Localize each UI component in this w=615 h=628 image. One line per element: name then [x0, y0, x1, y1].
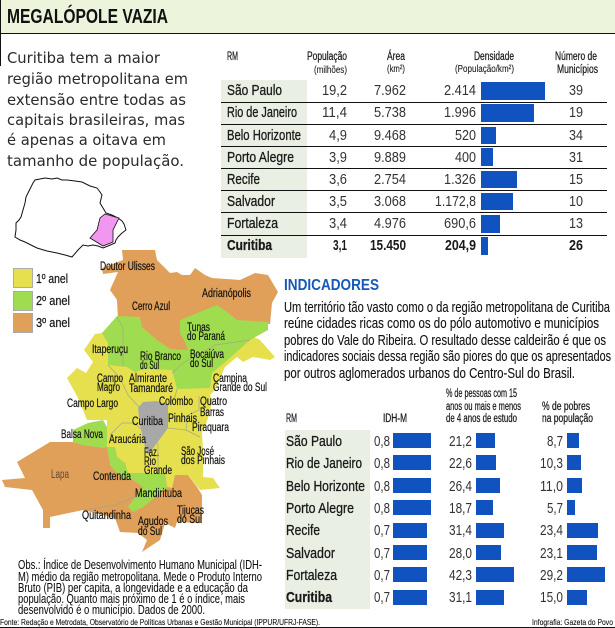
- row: Fortaleza: [286, 567, 605, 584]
- row: Recife: [227, 171, 583, 188]
- municipality labels: Quatro: [200, 396, 227, 408]
- row: Salvador: 0,7: [374, 546, 390, 562]
- row: Salvador: Salvador: [286, 546, 335, 562]
- municipality labels: Campo: [97, 373, 123, 385]
- indicators table: [285, 388, 605, 609]
- municipality labels: Balsa Nova: [61, 429, 103, 441]
- municipality labels: Campo Largo: [67, 398, 118, 410]
- row: São Paulo: [286, 433, 579, 450]
- row: Curitiba: [286, 590, 587, 606]
- legend: [14, 268, 70, 332]
- observation note: [18, 557, 262, 617]
- municipality labels: do Sul: [177, 514, 202, 526]
- municipality labels: Campina: [213, 373, 247, 385]
- observation note: Bruto (PIB) per capita, a longevidade e a educação da: [18, 580, 249, 595]
- table header: Número de: [555, 51, 597, 63]
- row: Recife: Recife: [286, 523, 320, 539]
- observation note: população. Quanto mais próximo de 1 é o índice, mais: [18, 591, 245, 606]
- table header: (km²): [387, 64, 405, 75]
- row: Porto Alegre: 31: [569, 150, 583, 166]
- row: Rio de Janeiro: 11,4: [322, 105, 347, 121]
- municipality labels: do Sul: [190, 358, 213, 370]
- municipality labels: Doutor Ulisses: [100, 261, 155, 273]
- municipality labels: Adrianópolis: [202, 288, 251, 300]
- row label background: [221, 80, 307, 258]
- Curitiba centre: [138, 401, 168, 455]
- row: São Paulo: 21,2: [449, 434, 472, 450]
- table header: Municípios: [557, 64, 598, 76]
- table header: de 4 anos de estudo: [446, 413, 517, 425]
- municipality labels: Bocaiúva: [190, 349, 224, 361]
- municipality labels: Cerro Azul: [132, 301, 170, 313]
- row: São Paulo: 2.414: [444, 83, 476, 99]
- row: Curitiba: 26: [569, 238, 583, 254]
- table header: RM: [286, 413, 297, 425]
- table header: População: [307, 51, 347, 63]
- row: São Paulo: 39: [569, 83, 583, 99]
- highlighted metropolitan region: [90, 214, 119, 246]
- row: Rio de Janeiro: 10,3: [540, 456, 563, 472]
- municipality labels: Magro: [97, 382, 120, 394]
- intro text: capitais brasileiras, mas: [7, 111, 185, 129]
- municipality labels: Tamandaré: [129, 383, 173, 395]
- municipality labels: Agudos: [138, 516, 168, 528]
- table header: Densidade: [474, 51, 514, 63]
- table header: na população: [542, 413, 593, 425]
- row: São Paulo: São Paulo: [286, 434, 342, 450]
- first ring: [67, 333, 275, 490]
- observation note: desenvolvido é o município. Dados de 2000.: [18, 602, 205, 617]
- municipality labels: Quitandinha: [82, 510, 131, 522]
- table header: (milhões): [314, 65, 347, 76]
- row: Curitiba: Curitiba: [286, 590, 333, 606]
- row: Salvador: [286, 545, 597, 562]
- row: Salvador: 1.172,8: [435, 194, 476, 210]
- table header: [286, 388, 593, 425]
- row: Belo Horizonte: [227, 127, 583, 144]
- table header: % de pobres: [542, 401, 590, 413]
- indicators heading: INDICADORES: [284, 277, 379, 294]
- intro text: Curitiba tem a maior: [7, 49, 161, 67]
- row: Curitiba: 3,1: [333, 238, 347, 254]
- second ring Balsa Nova: [73, 420, 107, 448]
- municipality labels: Faz.: [144, 447, 159, 459]
- municipality labels: Mandirituba: [135, 488, 182, 500]
- row: Belo Horizonte: Belo Horizonte: [227, 128, 301, 144]
- municipality labels: Curitiba: [132, 416, 163, 428]
- row: Salvador: 23,1: [540, 546, 563, 562]
- row: Curitiba: 204,9: [445, 238, 476, 254]
- observation note: Obs.: Índice de Desenvolvimento Humano Municipal (IDH-: [18, 557, 262, 572]
- second ring north: [102, 305, 268, 389]
- map: metropolitan region of Curitiba: [2, 250, 278, 552]
- density table: [221, 50, 607, 258]
- row: Rio de Janeiro: 0,8: [374, 456, 390, 472]
- second ring Contenda and Mandirituba: [107, 447, 167, 512]
- municipality labels: do Sul: [140, 360, 159, 372]
- legend: 1º anel: [36, 271, 68, 286]
- table header: Área: [387, 50, 405, 63]
- row: Rio de Janeiro: 5.738: [374, 105, 406, 121]
- row: Belo Horizonte: 520: [455, 128, 476, 144]
- legend: 2º anel: [36, 293, 70, 308]
- row: Curitiba: 31,1: [449, 590, 472, 606]
- row: Rio de Janeiro: Rio de Janeiro: [227, 105, 297, 121]
- row: Belo Horizonte: 9.468: [374, 128, 406, 144]
- row: Recife: 31,4: [449, 523, 472, 539]
- row: Belo Horizonte: [286, 478, 582, 495]
- row: Porto Alegre: [227, 148, 583, 166]
- row: Fortaleza: 13: [569, 216, 583, 232]
- row: Recife: 23,4: [540, 523, 563, 539]
- municipality labels: Colombo: [159, 396, 193, 408]
- row: Fortaleza: 4.976: [374, 216, 406, 232]
- row label background: [285, 430, 370, 609]
- row: Belo Horizonte: 11,0: [540, 479, 563, 495]
- row: São Paulo: [227, 82, 583, 100]
- row: Porto Alegre: 5,7: [547, 501, 563, 517]
- table header: IDH-M: [383, 413, 407, 425]
- row: Recife: 3,6: [329, 172, 347, 188]
- intro text: é apenas a oitava em: [7, 131, 166, 149]
- municipality labels: Tijucas: [177, 505, 204, 517]
- row: Recife: 0,7: [374, 523, 390, 539]
- row: Salvador: 28,0: [449, 546, 472, 562]
- municipality labels: Rio: [144, 456, 156, 468]
- locator map: Paraná state: [15, 178, 126, 257]
- row: Rio de Janeiro: 19: [569, 105, 583, 121]
- row: Fortaleza: 42,3: [449, 568, 472, 584]
- row: Porto Alegre: [286, 500, 575, 517]
- row: São Paulo: 0,8: [374, 434, 390, 450]
- municipality labels: [51, 261, 267, 538]
- municipality labels: dos Pinhais: [181, 455, 225, 467]
- municipality labels: do Paraná: [187, 331, 225, 343]
- row: Salvador: [227, 193, 583, 210]
- row: Salvador: 3,5: [329, 194, 347, 210]
- row: Salvador: 3.068: [374, 194, 406, 210]
- intro text: tamanho de população.: [7, 152, 184, 170]
- row: Curitiba: 15.450: [370, 238, 406, 254]
- row: Porto Alegre: Porto Alegre: [227, 150, 294, 166]
- title: MEGALÓPOLE VAZIA: [7, 4, 168, 28]
- intro text: região metropolitana em: [7, 70, 188, 88]
- row: Belo Horizonte: 34: [569, 128, 583, 144]
- third ring north: [102, 250, 278, 352]
- row: Recife: Recife: [227, 172, 260, 188]
- municipality labels: Grande: [144, 465, 172, 477]
- row: São Paulo: 8,7: [547, 434, 563, 450]
- municipality labels: Pinhais: [168, 413, 197, 425]
- row: Porto Alegre: Porto Alegre: [286, 501, 354, 517]
- table header: [227, 50, 598, 76]
- intro text: extensão entre todas as: [7, 91, 186, 109]
- row: Curitiba: [227, 237, 583, 255]
- row: Porto Alegre: 400: [455, 150, 476, 166]
- row: Belo Horizonte: 0,8: [374, 479, 390, 495]
- municipality labels: Almirante: [129, 373, 167, 385]
- footer: [0, 617, 615, 628]
- row: São Paulo: 7.962: [374, 83, 406, 99]
- row: Fortaleza: Fortaleza: [286, 568, 338, 584]
- row: São Paulo: 19,2: [322, 83, 347, 99]
- municipality labels: Barras: [200, 407, 224, 419]
- municipality labels: Rio Branco: [140, 351, 181, 363]
- row: Belo Horizonte: 4,9: [329, 128, 347, 144]
- municipality labels: Itaperuçu: [92, 344, 128, 356]
- row: Curitiba: 15,0: [540, 590, 563, 606]
- row: Salvador: 10: [569, 194, 583, 210]
- row: Curitiba: Curitiba: [227, 238, 273, 254]
- row: Recife: 15: [569, 172, 583, 188]
- municipality labels: Contenda: [93, 471, 131, 483]
- row: Fortaleza: [227, 215, 583, 233]
- row: Porto Alegre: 9.889: [374, 150, 406, 166]
- municipality labels: Tunas: [187, 322, 210, 334]
- row: Recife: 1.326: [444, 172, 476, 188]
- municipality labels: Grande do Sul: [213, 382, 267, 394]
- municipality labels: Lapa: [51, 469, 69, 481]
- row: Rio de Janeiro: [227, 104, 583, 122]
- header band: [0, 0, 615, 66]
- row: Rio de Janeiro: Rio de Janeiro: [286, 456, 362, 472]
- municipal borders: [83, 317, 250, 510]
- row: Fortaleza: 690,6: [444, 216, 476, 232]
- row: Fortaleza: 0,7: [374, 568, 390, 584]
- row: Salvador: Salvador: [227, 194, 275, 210]
- third ring south: [2, 442, 202, 552]
- row: Belo Horizonte: Belo Horizonte: [286, 479, 365, 495]
- row: Fortaleza: 3,4: [329, 216, 347, 232]
- row: Rio de Janeiro: 22,6: [449, 456, 472, 472]
- table header: (População/km²): [455, 64, 514, 75]
- observation note: M) médio da região metropolitana. Mede o Produto Interno: [18, 569, 262, 584]
- row: Recife: [286, 523, 598, 539]
- municipality labels: São José: [181, 446, 214, 458]
- intro text: [7, 49, 188, 170]
- municipality labels: Araucária: [109, 434, 146, 446]
- row: Porto Alegre: 18,7: [449, 501, 472, 517]
- row: Porto Alegre: 0,8: [374, 501, 390, 517]
- row: Curitiba: 0,7: [374, 590, 390, 606]
- row: Recife: 2.754: [374, 172, 406, 188]
- legend: 3º anel: [36, 315, 70, 330]
- row: São Paulo: São Paulo: [227, 83, 282, 99]
- municipality labels: Piraquara: [192, 422, 229, 434]
- table header: anos ou mais e menos: [446, 401, 521, 413]
- row: Fortaleza: 29,2: [540, 568, 563, 584]
- row: Fortaleza: Fortaleza: [227, 216, 279, 232]
- row: Belo Horizonte: 26,4: [449, 479, 472, 495]
- indicators paragraph: [284, 300, 611, 382]
- row: Porto Alegre: 3,9: [329, 150, 347, 166]
- row: Rio de Janeiro: 1.996: [444, 105, 476, 121]
- municipality labels: do Sul: [138, 526, 162, 538]
- table header: % de pessoas com 15: [446, 388, 517, 400]
- row: Rio de Janeiro: [286, 455, 581, 472]
- footer: Fonte: Redação e Metrodata, Observatório de Políticas Urbanas e Gestão Municipal (IPPUR/UFRJ-FASE).: [0, 617, 320, 627]
- table header: RM: [227, 51, 238, 63]
